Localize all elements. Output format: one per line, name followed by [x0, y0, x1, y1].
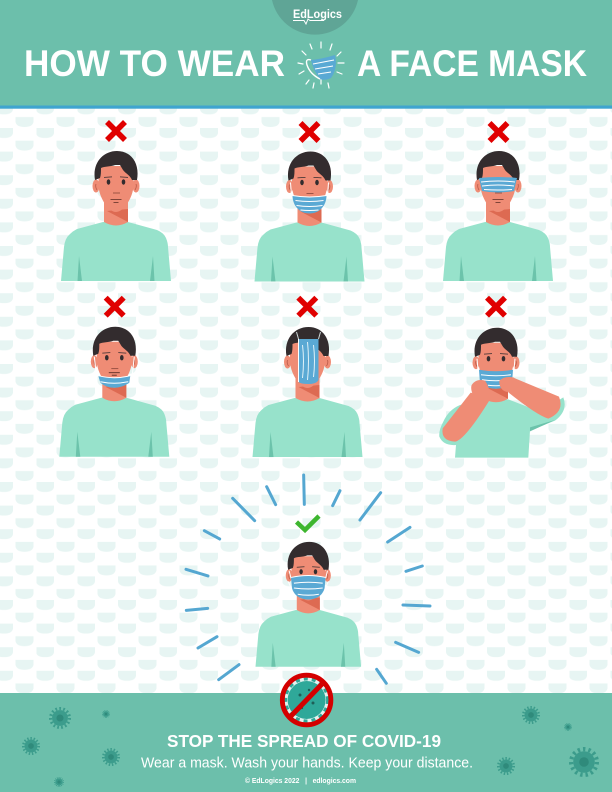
footer tagline: Wear a mask. Wash your hands. Keep your distance.: [141, 754, 473, 772]
icon: red cross: [106, 298, 124, 316]
icon: green check: [296, 516, 319, 530]
icon: red cross: [300, 123, 318, 141]
decorative viruses: [23, 707, 597, 786]
logo badge: [272, 0, 358, 35]
figure adjusting the mask with hands: [439, 328, 565, 458]
panel: mask below nose: [254, 123, 364, 282]
burst of blue rays: [186, 475, 430, 683]
panel: mask on forehead: [252, 298, 362, 457]
figure with mask over eyes: [443, 151, 553, 281]
figure with mask on chin: [59, 327, 169, 457]
header banner: [0, 0, 612, 109]
icon: red cross: [487, 298, 505, 316]
title left: HOW TO WEAR: [24, 42, 285, 84]
icon: red cross: [490, 123, 508, 141]
title right: A FACE MASK: [357, 42, 587, 84]
footer heading: STOP THE SPREAD OF COVID-19: [167, 731, 441, 751]
panel: touching mask: [439, 298, 565, 458]
logo badge: EdLogics: [293, 9, 342, 21]
icon: no virus sign: [282, 675, 331, 725]
panel: mask over eyes: [443, 123, 553, 281]
figure wearing mask correctly: [255, 542, 361, 667]
patterned background: [0, 106, 612, 696]
icon: face mask with rays: [298, 42, 344, 88]
icon: red cross: [298, 298, 316, 316]
icon: red cross: [107, 122, 125, 140]
panel: no mask: [61, 122, 171, 281]
copyright line: © EdLogics 2022 | edlogics.com: [245, 777, 356, 785]
panel: correct mask wearing: [186, 475, 430, 683]
figure with mask over forehead and face: [252, 327, 362, 457]
panel: mask on chin: [59, 298, 169, 457]
footer banner: [0, 675, 612, 792]
figure with mask under nose: [254, 152, 364, 282]
figure without mask: [61, 151, 171, 281]
